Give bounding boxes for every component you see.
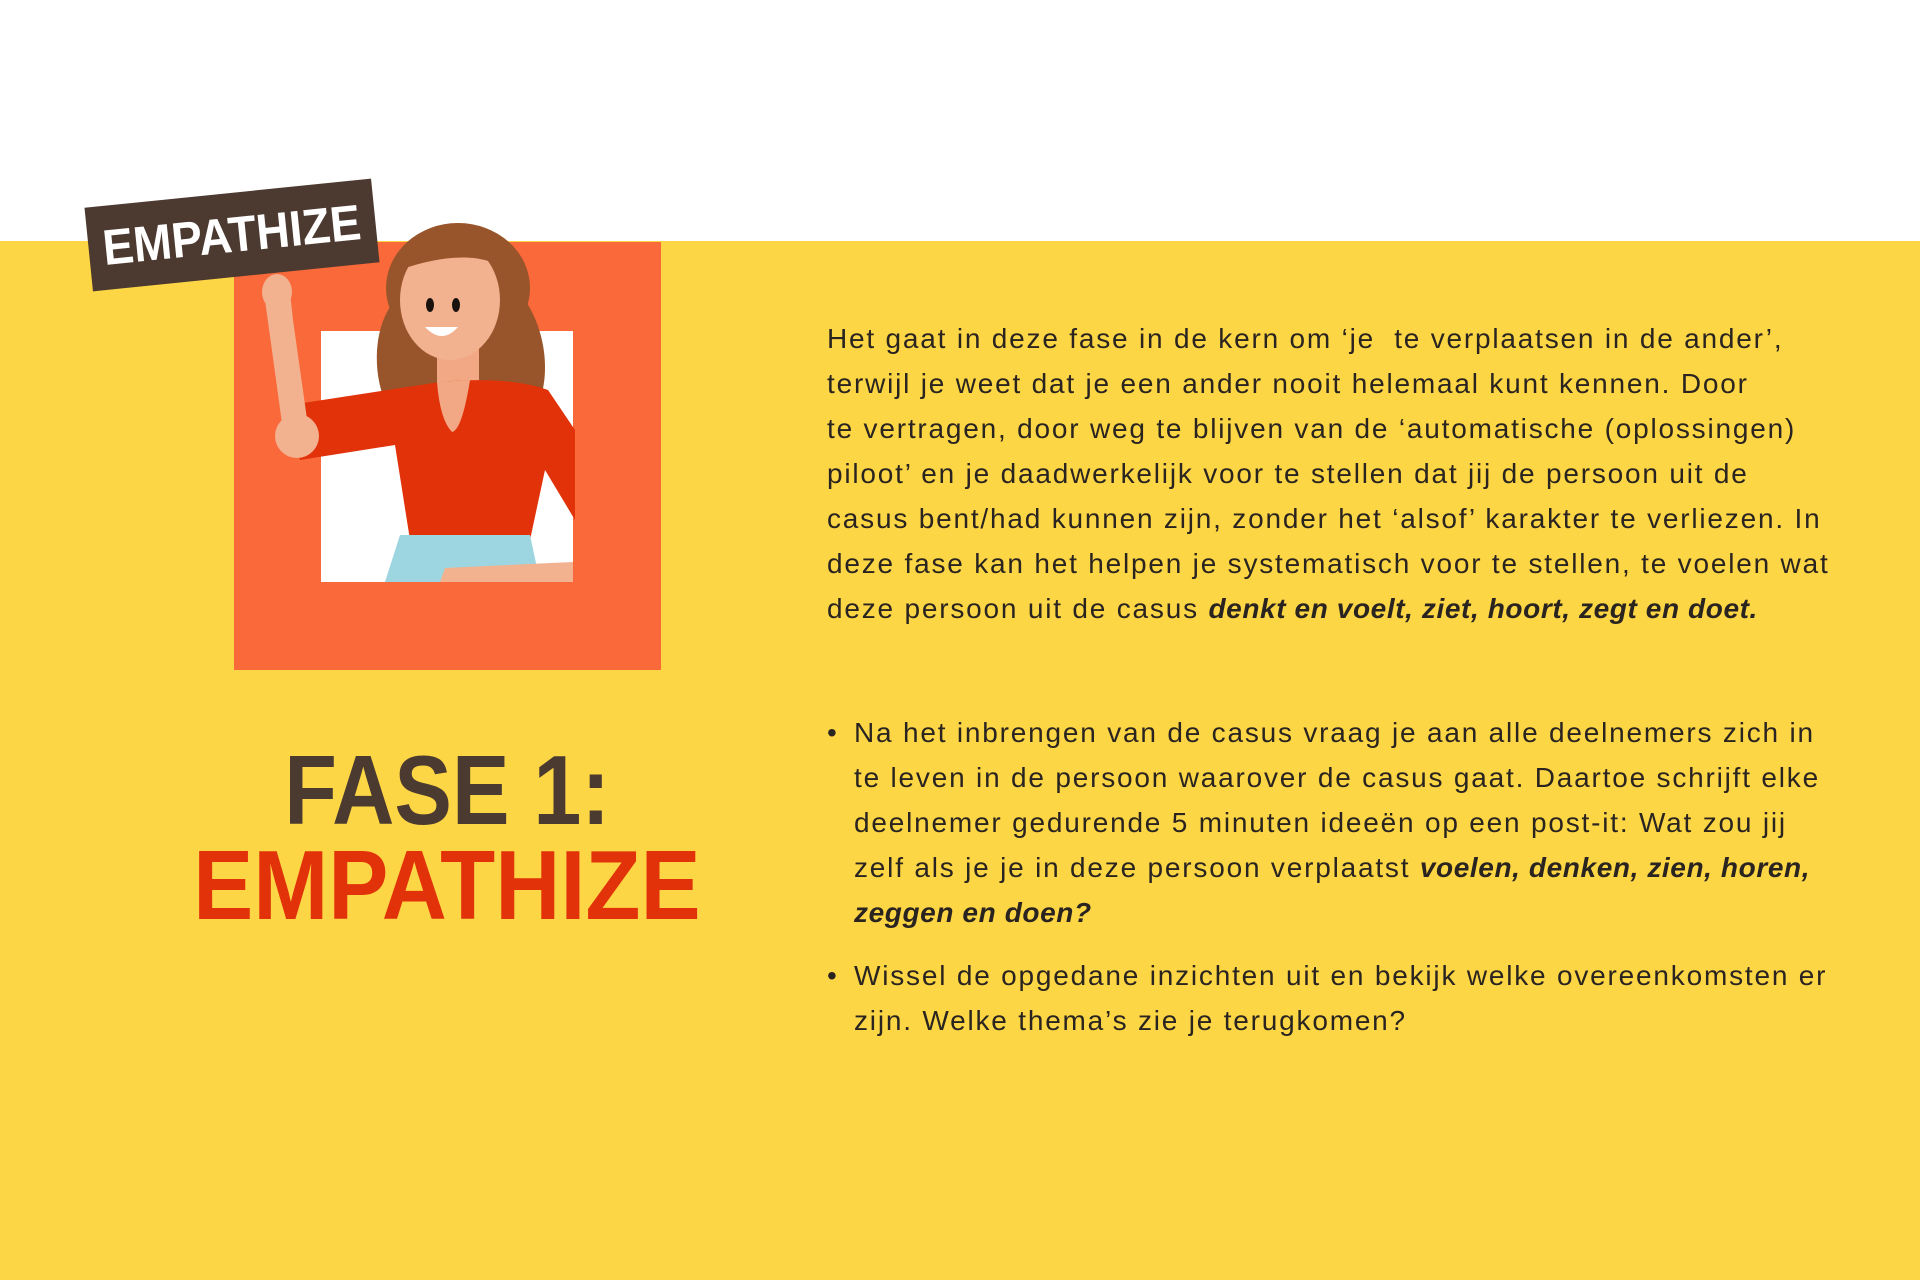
heading: FASE 1: FASE 1: [284,735,610,845]
label: EMPATHIZE tag [84,179,380,291]
bullet 1: te leven in de persoon waarover de casus gaat. Daartoe schrijft elke [854,762,1820,793]
woman figure [262,223,575,582]
label: EMPATHIZE tag: EMPATHIZE [100,194,364,276]
intro paragraph: deze persoon uit de casus denkt en voelt, ziet, hoort, zegt en doet. [827,593,1758,624]
illustration: woman in window [234,223,661,670]
intro paragraph: deze fase kan het helpen je systematisch voor te stellen, te voelen wat [827,548,1830,579]
intro paragraph: Het gaat in deze fase in de kern om ‘je te verplaatsen in de ander’, [827,323,1783,354]
bullet 1: zelf als je je in deze persoon verplaatst voelen, denken, zien, horen, [854,852,1810,883]
bullet 2: Wissel de opgedane inzichten uit en bekijk welke overeenkomsten er [854,960,1827,991]
bullet 2: zijn. Welke thema’s zie je terugkomen? [854,1005,1407,1036]
intro paragraph: casus bent/had kunnen zijn, zonder het ‘alsof’ karakter te verliezen. In [827,503,1821,534]
intro paragraph: terwijl je weet dat je een ander nooit helemaal kunt kennen. Door [827,368,1749,399]
heading: EMPATHIZE: EMPATHIZE [193,830,701,940]
bullet 1 [827,717,1820,928]
intro paragraph: piloot’ en je daadwerkelijk voor te stellen dat jij de persoon uit de [827,458,1749,489]
bullet 1: Na het inbrengen van de casus vraag je aan alle deelnemers zich in [854,717,1815,748]
bullet 1: zeggen en doen? [854,897,1092,928]
bullet 2 [827,960,1827,1036]
bullet 1: deelnemer gedurende 5 minuten ideeën op een post-it: Wat zou jij [854,807,1787,838]
bullet 2: • [827,960,839,991]
orange square frame [234,242,661,670]
intro paragraph: te vertragen, door weg te blijven van de ‘automatische (oplossingen) [827,413,1796,444]
intro paragraph [827,323,1830,624]
bullet 1: • [827,717,839,748]
